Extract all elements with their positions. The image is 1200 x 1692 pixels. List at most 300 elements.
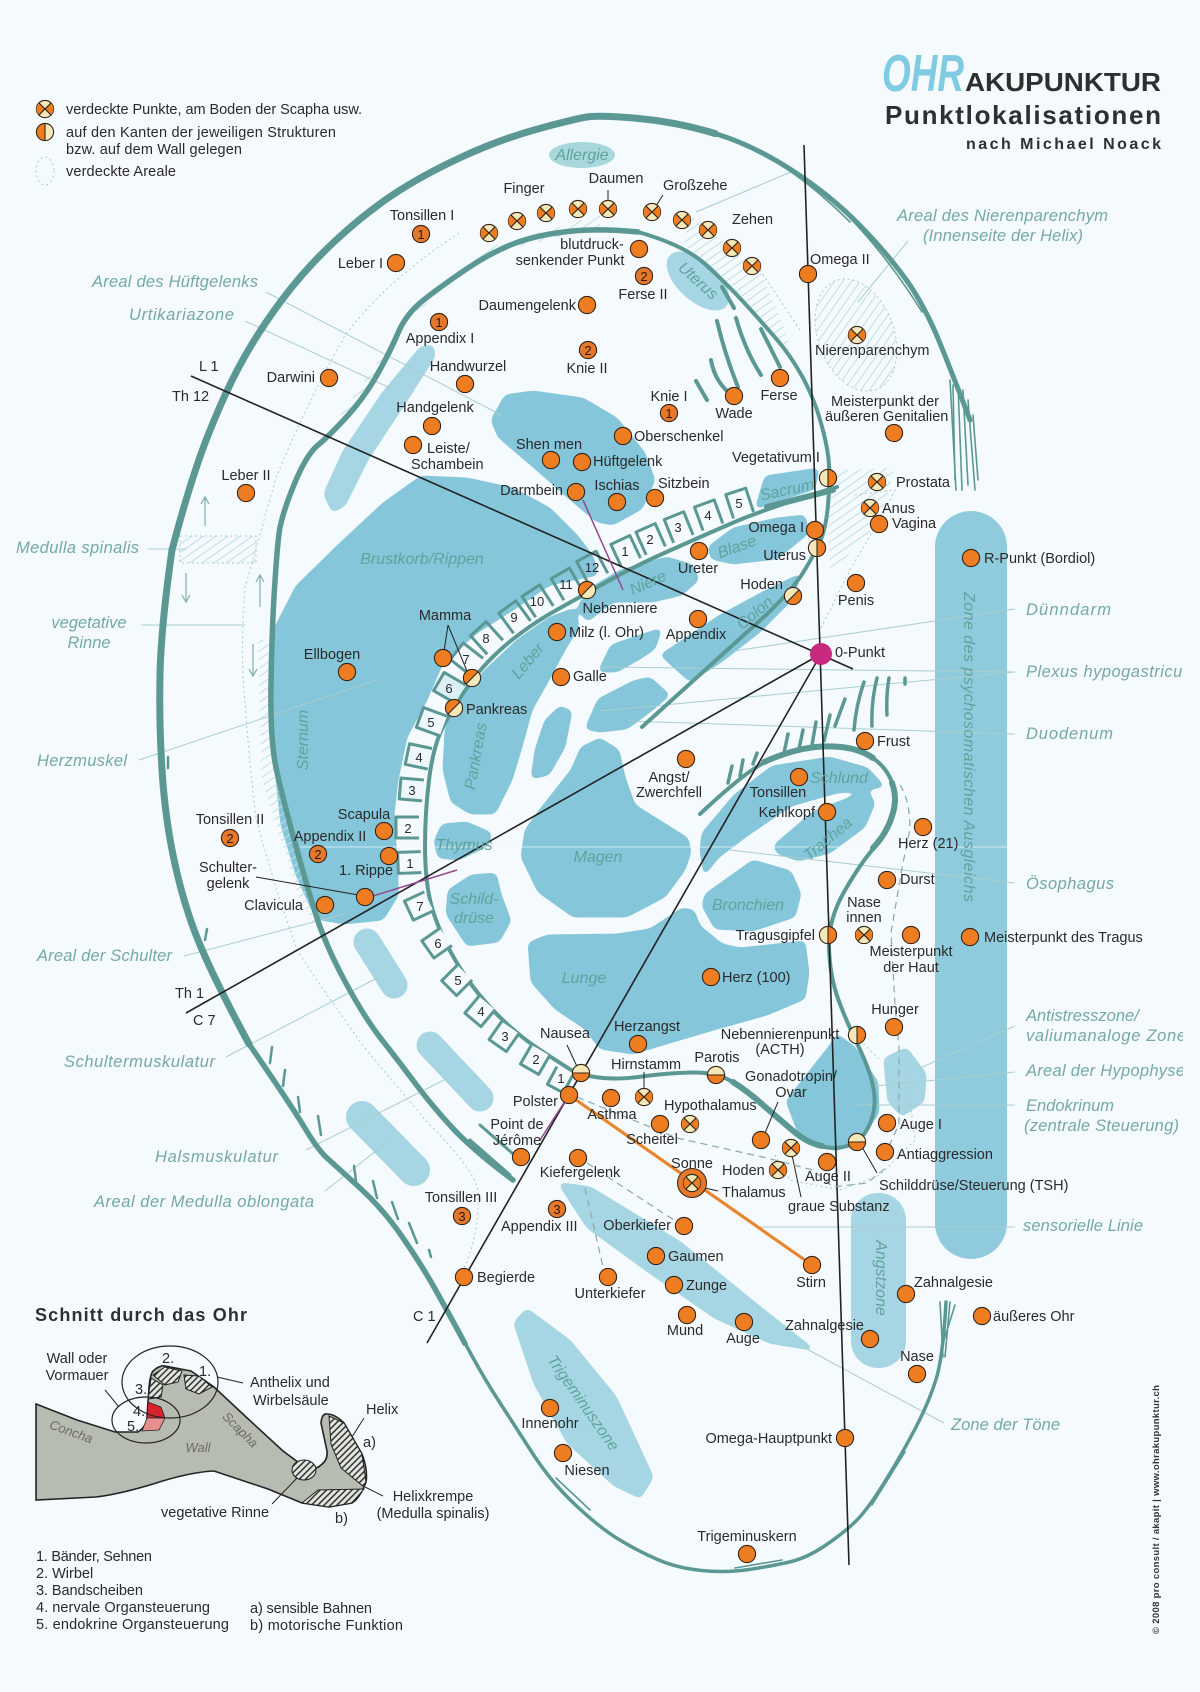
point: Schilddrüse/Steuerung xyxy=(848,1133,1068,1194)
point: Prostata: Prostata xyxy=(896,475,951,491)
title block: AKUPUNKTUR xyxy=(965,67,1161,97)
italic zone labels outside ear: Areal der Medulla oblongata xyxy=(93,1193,314,1211)
point: Tonsillen: Tonsillen xyxy=(750,785,806,801)
vertebra numbers xyxy=(404,496,743,1086)
point: Nase xyxy=(900,1349,934,1383)
point: Appendix I: 1 xyxy=(435,315,443,330)
point: Pankreas xyxy=(442,696,527,720)
point: Omega II xyxy=(799,252,870,283)
diagram labels: 5. xyxy=(127,1419,139,1435)
point: Knie I: 1 xyxy=(665,406,673,421)
point: Nausea: Nausea xyxy=(540,1026,591,1042)
point: Omega I: Omega I xyxy=(748,520,804,536)
line labels: Th 1 xyxy=(175,986,204,1002)
diagram labels: Helixkrempe xyxy=(393,1489,473,1505)
point: Handwurzel: Handwurzel xyxy=(430,359,506,375)
point: Tonsillen II: Tonsillen II xyxy=(196,812,264,828)
point: Anus xyxy=(861,499,915,517)
point: Nebennierenpunkt: (ACTH) xyxy=(755,1042,805,1058)
area: Lunge xyxy=(528,908,809,1054)
organ names inside zones: Allergie xyxy=(554,147,609,164)
point: äußeres Ohr: äußeres Ohr xyxy=(993,1309,1075,1325)
point: Hoden: Hoden xyxy=(722,1163,765,1179)
point: Gaumen: Gaumen xyxy=(668,1249,724,1265)
point: Penis xyxy=(838,574,874,609)
points: Mamma: Mamma xyxy=(419,608,472,624)
point: Anus: Anus xyxy=(882,501,915,517)
point: Hoden: Hoden xyxy=(740,577,783,593)
numbered ellipses xyxy=(112,1346,218,1443)
organ names inside zones: Uterus xyxy=(674,259,721,303)
area: small organ xyxy=(531,706,572,779)
point: Hunger: Hunger xyxy=(871,1002,919,1018)
point: Frust: Frust xyxy=(877,734,910,750)
vertebra numbers: 11 xyxy=(559,577,573,592)
point: Knie I xyxy=(650,389,688,422)
point: Asthma xyxy=(587,1089,638,1123)
diagram labels: Scapha xyxy=(219,1409,261,1451)
diagram heading: Schnitt durch das Ohr xyxy=(35,1305,247,1325)
strip: Halsmuskulatur xyxy=(430,1045,480,1098)
diagram labels: 2. xyxy=(162,1351,174,1367)
point: Scheitel xyxy=(626,1115,678,1148)
organ names inside zones: Brustkorb/Rippen xyxy=(360,551,484,568)
point: Knie II: Knie II xyxy=(566,361,608,377)
area: Bronchien xyxy=(702,860,801,931)
point: Point de Jérôme: Point de xyxy=(490,1117,544,1133)
point: Vagina xyxy=(870,515,937,533)
point: Angst/Zwerchfell: Angst/ xyxy=(648,770,691,786)
vertebra numbers: 6 xyxy=(434,936,442,951)
point: Vegetativum I: Vegetativum I xyxy=(732,450,820,466)
point: Durst: Durst xyxy=(900,872,935,888)
area: strip Darwini xyxy=(325,346,434,511)
points: Zehen xyxy=(673,211,773,275)
area: Milz xyxy=(598,628,662,672)
point: Hoden xyxy=(722,1161,787,1179)
point: Stirn: Stirn xyxy=(796,1275,826,1291)
italic zone labels outside ear: Areal der Hypophyse xyxy=(1025,1062,1185,1080)
italic zone labels outside ear: Plexus hypogastricus xyxy=(1026,663,1191,681)
point: Handwurzel xyxy=(430,359,506,393)
spinal arrows xyxy=(182,497,264,676)
organ names inside zones: Schild- xyxy=(450,891,498,908)
point: Kiefergelenk: Kiefergelenk xyxy=(540,1165,621,1181)
pale zones xyxy=(325,346,925,1497)
area: Thymus xyxy=(434,822,492,860)
acupuncture points with labels xyxy=(196,171,1143,1563)
point: Zunge xyxy=(665,1276,727,1294)
point: Großzehe: Großzehe xyxy=(663,178,727,194)
point: Appendix III: 3 xyxy=(553,1202,561,1217)
organ names inside zones: Angstzone xyxy=(872,1239,889,1316)
point: Meisterpunkt der Haut xyxy=(869,926,953,976)
italic zone labels outside ear: vegetative xyxy=(51,614,127,632)
point: Nase innen xyxy=(846,895,882,944)
point: 1. Rippe xyxy=(339,847,398,879)
point: Gaumen xyxy=(647,1247,724,1265)
point: Ferse xyxy=(760,369,798,404)
point: Uterus: Uterus xyxy=(763,548,806,564)
point: Appendix xyxy=(666,610,727,643)
point: blutdrucksenkender Punkt xyxy=(516,237,648,269)
point: Daumen: Daumen xyxy=(589,171,643,187)
diagram labels: Anthelix und xyxy=(250,1375,330,1391)
point: Sonne and Thalamus xyxy=(671,1156,786,1201)
vertebra numbers: 8 xyxy=(482,631,490,646)
italic zone labels outside ear: sensorielle Linie xyxy=(1023,1217,1143,1235)
scapha hatching and concealed areas xyxy=(180,215,915,1278)
point: Auge xyxy=(726,1313,760,1347)
point: Ischias: Ischias xyxy=(594,478,640,494)
italic zone labels outside ear: Halsmuskulatur xyxy=(155,1148,280,1166)
area: Schlund xyxy=(700,757,885,876)
line labels xyxy=(172,359,436,1325)
point: Pankreas: Pankreas xyxy=(466,702,527,718)
point: blutdrucksenkender Punkt: blutdruck- xyxy=(560,237,624,253)
organ names inside zones: Thymus xyxy=(436,837,492,854)
points: Finger: Finger xyxy=(503,181,545,197)
point: Schilddrüse/Steuerung: Schilddrüse/Steuerung (TSH) xyxy=(879,1178,1068,1194)
italic zone labels outside ear: Ösophagus xyxy=(1026,875,1114,893)
italic zone labels outside ear: Rinne xyxy=(67,634,111,652)
vertebra numbers: 7 xyxy=(416,899,424,914)
vertebrae boxes xyxy=(396,488,753,1093)
italic zone labels outside ear: (Innenseite der Helix) xyxy=(923,227,1083,245)
title block: OHR xyxy=(882,45,964,103)
point: Knie II xyxy=(566,341,608,377)
point: Oberkiefer: Oberkiefer xyxy=(603,1218,671,1234)
point: Kiefergelenk xyxy=(540,1149,621,1181)
point: Appendix I: Appendix I xyxy=(406,331,474,347)
point: Nierenparenchym: Nierenparenchym xyxy=(815,343,929,359)
point: Nebennierenpunkt xyxy=(721,1026,866,1058)
vertebra numbers: 3 xyxy=(408,783,416,798)
point: Nebenniere xyxy=(575,578,657,617)
diagram labels: Wirbelsäule xyxy=(253,1393,329,1409)
point: Nase innen: Nase xyxy=(847,895,881,911)
organ names inside zones: Colon xyxy=(734,593,777,633)
point: Auge: Auge xyxy=(726,1331,760,1347)
vertebra numbers: 2 xyxy=(404,821,412,836)
point: Sonne and Thalamus: Thalamus xyxy=(722,1185,786,1201)
organ names inside zones: Leber xyxy=(509,640,548,682)
diagram labels: (Medulla spinalis) xyxy=(377,1506,489,1522)
legend: auf den Kanten der jeweiligen Strukturen xyxy=(66,125,336,141)
organ names inside zones: drüse xyxy=(454,910,494,927)
point: Begierde: Begierde xyxy=(477,1270,535,1286)
point: Ferse II: 2 xyxy=(640,269,648,284)
point: Trigeminuskern xyxy=(697,1529,797,1563)
point: Parotis xyxy=(694,1050,740,1084)
point: Trigeminuskern: Trigeminuskern xyxy=(697,1529,797,1545)
point: Herzangst xyxy=(614,1019,680,1053)
point: Meisterpunkt der Haut: der Haut xyxy=(883,960,939,976)
point: Scapula xyxy=(338,807,393,840)
point: Begierde xyxy=(455,1268,535,1286)
vertebra numbers: 5 xyxy=(735,496,743,511)
point: Vegetativum I xyxy=(732,450,837,487)
vertebra numbers: 1 xyxy=(557,1071,565,1086)
diagram labels: Wall xyxy=(185,1440,212,1455)
point: Auge I xyxy=(878,1114,942,1133)
italic zone labels outside ear xyxy=(16,207,1191,1434)
point: Appendix III xyxy=(501,1200,578,1235)
point: Darmbein: Darmbein xyxy=(500,483,563,499)
point leader lines xyxy=(256,190,877,1197)
area: Magen xyxy=(521,738,691,917)
points: Mamma xyxy=(419,608,484,690)
organ names inside zones: Niere xyxy=(627,568,669,599)
diagram labels: a) xyxy=(363,1435,376,1451)
diagram key: a) sensible Bahnen xyxy=(250,1601,372,1617)
point: Tonsillen II xyxy=(196,812,264,847)
legend xyxy=(36,100,362,185)
point: Milz: Milz (l. Ohr) xyxy=(569,625,644,641)
area: Colon xyxy=(660,573,802,682)
diagram leaders xyxy=(105,1377,383,1504)
point: Angst/Zwerchfell xyxy=(636,750,702,801)
point: blutdrucksenkender Punkt: senkender Punkt xyxy=(516,253,624,269)
italic zone labels outside ear: Dünndarm xyxy=(1026,601,1111,619)
area: Leber und Pankreas xyxy=(443,608,579,814)
point: Kehlkopf: Kehlkopf xyxy=(759,805,816,821)
italic zone labels outside ear: Areal der Schulter xyxy=(36,947,174,965)
point: Leiste/Schambein xyxy=(404,436,484,473)
vertebra numbers: 10 xyxy=(530,594,544,609)
point: Schultergelenk: Schulter- xyxy=(199,860,257,876)
point: Zahnalgesie upper: Zahnalgesie xyxy=(914,1275,993,1291)
point: Leiste/Schambein: Leiste/ xyxy=(427,441,471,457)
point: Sonne and Thalamus: Sonne xyxy=(671,1156,713,1172)
point: Antiaggression: Antiaggression xyxy=(897,1147,993,1163)
point: Wade xyxy=(715,387,753,422)
point: Niesen: Niesen xyxy=(564,1463,610,1479)
area: Sacrum xyxy=(755,468,819,509)
italic zone labels outside ear: Herzmuskel xyxy=(37,752,128,770)
diagram key: 4. nervale Organsteuerung xyxy=(36,1600,210,1616)
point: Schultergelenk xyxy=(199,860,374,906)
point: Hirnstamm xyxy=(611,1057,681,1106)
point: Nebenniere: Nebenniere xyxy=(583,601,657,617)
point: Herz 21 xyxy=(898,818,958,852)
point: Handgelenk: Handgelenk xyxy=(396,400,474,416)
inner helix ridge and colon line xyxy=(271,230,829,1180)
point: Appendix III: Appendix III xyxy=(501,1219,578,1235)
point: Parotis: Parotis xyxy=(694,1050,740,1066)
italic zone labels outside ear: Endokrinum xyxy=(1026,1097,1114,1115)
organ names inside zones: Lunge xyxy=(562,970,606,987)
point: Appendix II: 2 xyxy=(314,847,322,862)
italic zone labels outside ear: (zentrale Steuerung) xyxy=(1024,1117,1179,1135)
reference lines through 0-Punkt xyxy=(186,145,853,1565)
area: Blase xyxy=(708,515,809,564)
point: Hypothalamus: Hypothalamus xyxy=(664,1098,757,1114)
dashed connector lines xyxy=(577,785,910,1267)
vertebra numbers: 4 xyxy=(415,750,423,765)
organ names inside zones: Pankreas xyxy=(462,722,491,791)
diagram labels xyxy=(46,1351,489,1527)
hatched regions xyxy=(148,1367,366,1507)
organ names inside zones: Sternum xyxy=(295,710,312,770)
red organ control regions xyxy=(142,1402,165,1431)
point: Shen men xyxy=(516,437,582,469)
point: Appendix: Appendix xyxy=(666,627,727,643)
point: Leber I xyxy=(338,254,405,272)
point: Wade: Wade xyxy=(715,406,753,422)
section diagram: Schnitt durch das Ohr xyxy=(35,1305,489,1634)
zone: Angstzone xyxy=(851,1193,906,1368)
diagram labels: 3. xyxy=(135,1382,147,1398)
point: Nase innen: innen xyxy=(846,910,882,926)
copyright note: © 2008 pro consult / akapit | www.ohrakupunktur.ch xyxy=(1151,1385,1162,1634)
point: Nebennierenpunkt: Nebennierenpunkt xyxy=(721,1027,839,1043)
point: Innenohr xyxy=(521,1399,579,1432)
point: Scapula: Scapula xyxy=(338,807,391,823)
point: 0-Punkt xyxy=(810,643,885,665)
diagram labels: Concha xyxy=(48,1417,95,1446)
point: Tonsillen I: Tonsillen I xyxy=(390,208,454,224)
point: Schultergelenk: gelenk xyxy=(207,876,250,892)
vertebra numbers: 5 xyxy=(454,973,462,988)
vertebra numbers: 12 xyxy=(585,560,599,575)
points: Finger xyxy=(480,181,587,242)
point: Zunge: Zunge xyxy=(686,1278,727,1294)
point: Hirnstamm: Hirnstamm xyxy=(611,1057,681,1073)
diagram key: b) motorische Funktion xyxy=(250,1618,403,1634)
point: Kehlkopf xyxy=(759,803,836,821)
point: Ellbogen xyxy=(304,647,360,681)
diagram labels: 4. xyxy=(133,1404,145,1420)
point: Gonadotropin/Ovar: Gonadotropin/ xyxy=(745,1069,838,1085)
point: Herz 21: Herz (21) xyxy=(898,836,958,852)
point: Ischias xyxy=(594,478,640,511)
point: Zahnalgesie lower: Zahnalgesie xyxy=(785,1318,864,1334)
organ names inside zones xyxy=(295,147,977,1454)
area: Kiefer xyxy=(560,1184,812,1349)
area: Trigeminuszone xyxy=(515,1310,652,1497)
organ names inside zones: Bronchien xyxy=(712,897,784,914)
vertebra numbers: 1 xyxy=(621,544,629,559)
vertebra numbers: 3 xyxy=(501,1029,509,1044)
point: Sitzbein: Sitzbein xyxy=(658,476,710,492)
point: Mund: Mund xyxy=(667,1323,703,1339)
point: Clavicula xyxy=(244,896,334,914)
area: Brustkorb xyxy=(270,476,598,924)
point: Tonsillen III: 3 xyxy=(458,1209,466,1224)
point: Zahnalgesie upper xyxy=(897,1275,993,1303)
diagram labels: 1. xyxy=(199,1364,211,1380)
point: Durst xyxy=(878,871,935,889)
vertebra numbers: 4 xyxy=(477,1004,485,1019)
area: Allergie xyxy=(549,142,615,168)
strip: Schultermuskulatur xyxy=(367,942,394,985)
point: Ureter xyxy=(678,542,718,577)
italic zone labels outside ear: valiumanaloge Zone xyxy=(1026,1027,1186,1045)
point: Nausea xyxy=(540,1026,591,1082)
point: Appendix I xyxy=(406,313,474,347)
organ names inside zones: Schlund xyxy=(810,770,869,787)
legend: verdeckte Areale xyxy=(66,164,176,180)
legend: bzw. auf dem Wall gelegen xyxy=(66,142,242,158)
point: Darwini xyxy=(267,369,338,387)
point: Meisterpunkt der äußeren Genitalien: Meisterpunkt der xyxy=(831,394,939,410)
organ names inside zones: Trachea xyxy=(801,814,856,864)
point: Antiaggression xyxy=(876,1143,993,1163)
point: Polster: Polster xyxy=(513,1094,558,1110)
point: Point de Jérôme: Jérôme xyxy=(493,1133,541,1149)
line labels: Th 12 xyxy=(172,389,209,405)
area: Endokrinum xyxy=(786,1034,879,1151)
point: Tonsillen III xyxy=(425,1190,497,1225)
italic zone labels outside ear: Urtikariazone xyxy=(129,306,234,324)
antihelix, spine line, tragus curve xyxy=(425,287,905,1175)
line labels: L 1 xyxy=(199,359,219,375)
diagram labels: b) xyxy=(335,1511,348,1527)
point: Meisterpunkt der Haut: Meisterpunkt xyxy=(869,944,953,960)
zone: psychosomatic balance xyxy=(935,511,1007,1259)
point: Herzangst: Herzangst xyxy=(614,1019,680,1035)
area: Hüfte xyxy=(491,391,655,525)
point: Prostata xyxy=(868,473,951,491)
diagram key: 2. Wirbel xyxy=(36,1566,93,1582)
diagram labels: Helix xyxy=(366,1402,399,1418)
point: Leber II xyxy=(221,468,271,502)
vertebra numbers: 2 xyxy=(646,532,654,547)
points: Zehen: Zehen xyxy=(732,212,773,228)
italic zone labels outside ear: Medulla spinalis xyxy=(16,539,139,557)
vertebra numbers: 6 xyxy=(445,681,453,696)
legend: verdeckte Punkte, am Boden der Scapha usw. xyxy=(66,102,362,118)
point: Tragusgipfel: Tragusgipfel xyxy=(736,928,815,944)
italic zone labels outside ear: Areal des Nierenparenchym xyxy=(896,207,1108,225)
diagram key xyxy=(36,1549,403,1634)
line labels: C 7 xyxy=(193,1013,216,1029)
organ names inside zones: Trigeminuszone xyxy=(543,1352,622,1454)
point: Hoden xyxy=(740,577,805,608)
point: Leber I: Leber I xyxy=(338,256,383,272)
point: Tonsillen I xyxy=(390,208,454,243)
vertebra numbers: 5 xyxy=(427,715,435,730)
area: Schilddrüse xyxy=(446,873,511,946)
point: Darwini: Darwini xyxy=(267,370,315,386)
point: Tonsillen xyxy=(750,768,808,801)
point: Unterkiefer: Unterkiefer xyxy=(575,1286,646,1302)
italic zone labels outside ear: Duodenum xyxy=(1026,725,1113,743)
point: Stirn xyxy=(796,1256,826,1291)
diagram key: 3. Bandscheiben xyxy=(36,1583,143,1599)
area: Hypophyse xyxy=(885,1049,925,1115)
point: Asthma: Asthma xyxy=(587,1107,638,1123)
cross-section shape xyxy=(36,1366,366,1507)
vertebra numbers: 4 xyxy=(704,508,712,523)
leader lines to italic labels xyxy=(139,172,1015,1423)
point: Ferse II xyxy=(618,267,668,303)
point: Penis: Penis xyxy=(838,593,874,609)
point: Point de Jérôme xyxy=(490,1117,544,1166)
area: Trachea xyxy=(774,791,875,861)
point: Leiste/Schambein: Schambein xyxy=(411,457,484,473)
point: Auge I: Auge I xyxy=(900,1117,942,1133)
italic zone labels outside ear: Antistresszone/ xyxy=(1025,1007,1140,1025)
strip: Medulla oblongata xyxy=(362,1117,414,1170)
helix outer rim xyxy=(160,116,978,1572)
point: Hypothalamus xyxy=(664,1098,757,1133)
point: Hunger xyxy=(871,1002,919,1036)
diagram key: 1. Bänder, Sehnen xyxy=(36,1549,152,1565)
organ names inside zones: Zone des psychosomatischen Ausgleichs xyxy=(960,591,977,902)
point: Darmbein xyxy=(500,483,585,501)
